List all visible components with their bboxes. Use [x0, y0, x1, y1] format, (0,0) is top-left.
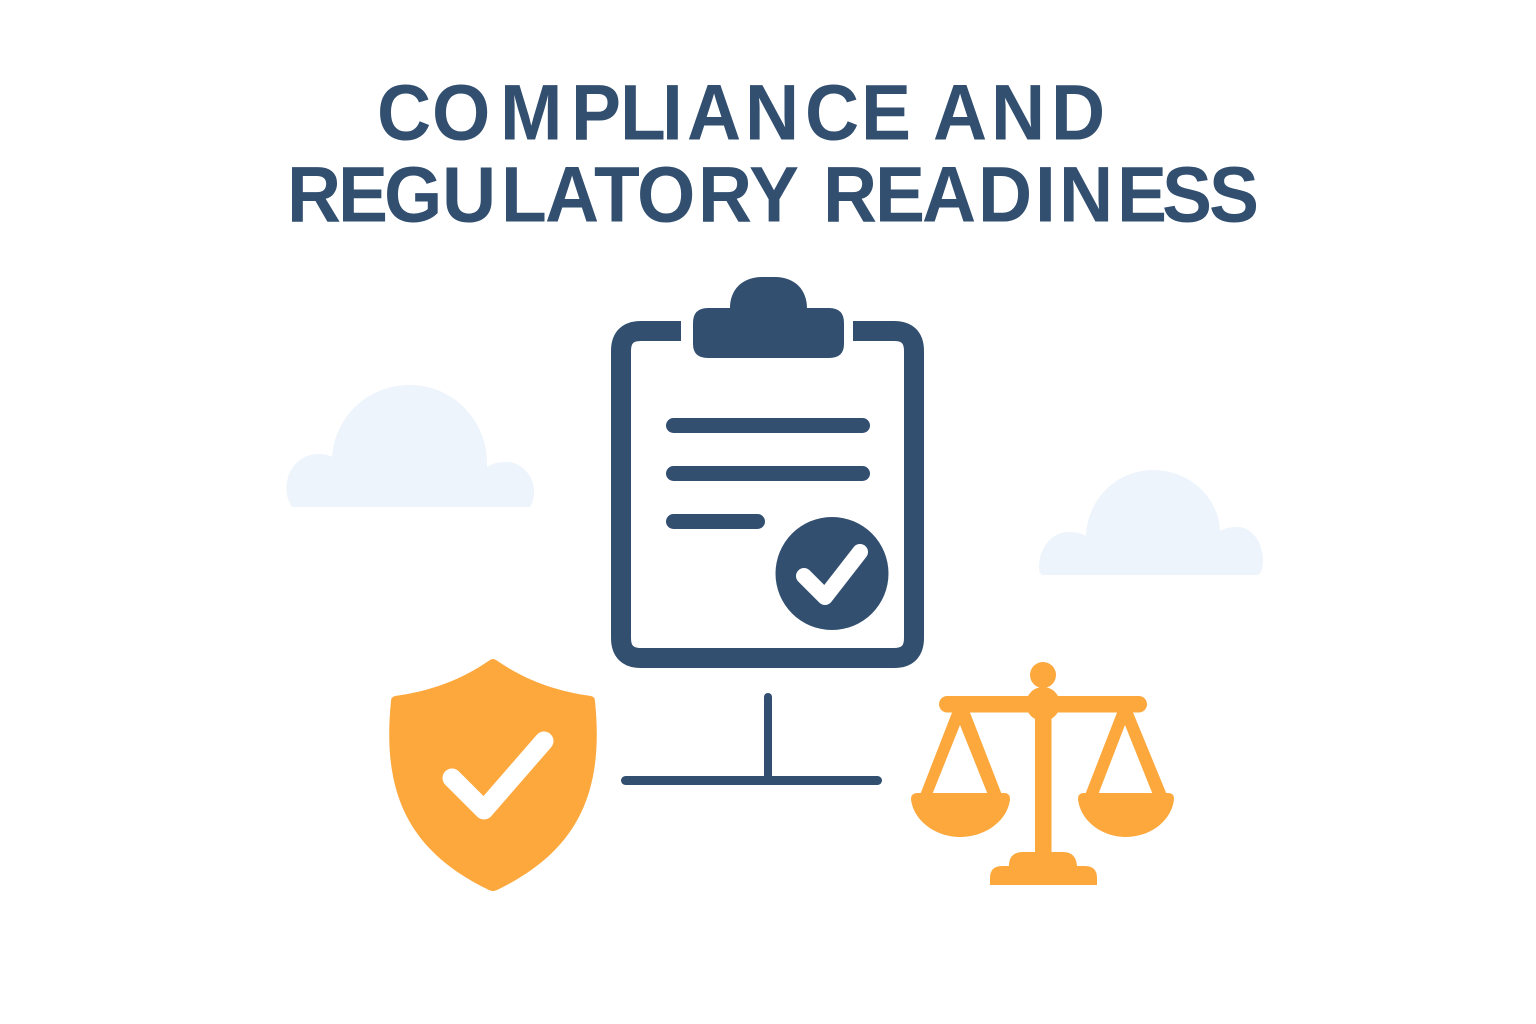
clipboard clip — [693, 277, 844, 358]
pivot — [1026, 687, 1060, 721]
column — [1035, 704, 1052, 860]
text lines — [666, 418, 870, 529]
base — [990, 852, 1097, 885]
title — [287, 69, 1259, 239]
icon: shield with check — [389, 659, 597, 891]
clipboard frame — [621, 331, 914, 658]
title: REGULATORY READINESS — [287, 151, 1259, 239]
beam — [939, 696, 1147, 712]
icon: balance scale — [911, 662, 1174, 885]
check badge — [776, 517, 888, 630]
right pan — [1078, 710, 1174, 837]
icon: right cloud — [1039, 470, 1263, 575]
icon: clipboard — [621, 277, 914, 658]
connector lines — [621, 693, 882, 785]
icon: left cloud — [286, 385, 534, 507]
top knob — [1030, 662, 1056, 688]
left pan — [911, 710, 1010, 837]
title: COMPLIANCE AND — [377, 69, 1105, 157]
